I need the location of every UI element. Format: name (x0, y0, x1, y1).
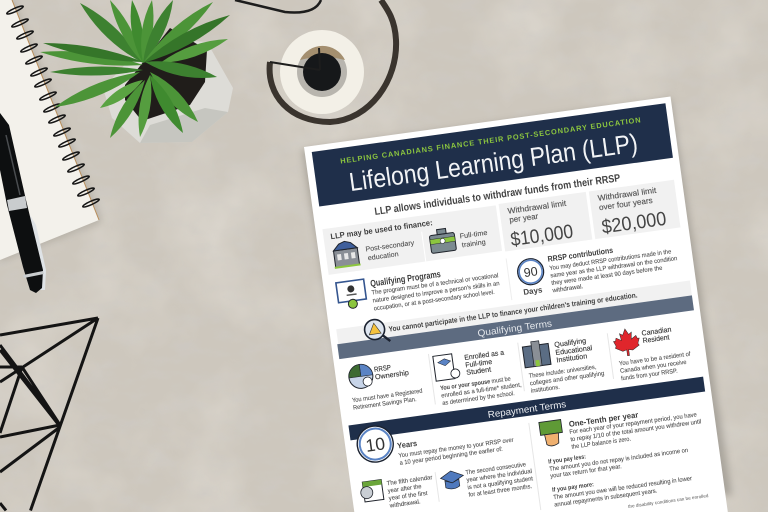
warning text: You cannot participate in the LLP to finance your children's training or education. (388, 290, 638, 334)
body: a 10 year period beginning the earlier of: (399, 446, 503, 467)
condition: second consecutive year (465, 460, 535, 499)
icon: 90 days ring (516, 257, 545, 286)
panel heading: LLP may be used to finance: (330, 218, 433, 241)
body: For each year of your repayment period, you have (569, 411, 698, 436)
body: The program must be of a technical or vocational (371, 272, 499, 297)
days label: Days (523, 285, 543, 297)
condition: second consecutive year: The second consecutive (465, 461, 527, 476)
icon: calendar (359, 480, 384, 502)
heading: Qualifying Programs (369, 268, 441, 289)
body: You may deduct RRSP contributions made in the (549, 248, 672, 272)
condition: fifth calendar year: year of the first (388, 490, 428, 502)
label: full-time training: Full-time (459, 230, 488, 241)
header banner (312, 103, 673, 206)
wire pyramid decoration (0, 318, 98, 510)
body (528, 363, 606, 395)
icon: 90 days ring: 90 (523, 264, 539, 280)
condition: second consecutive year: year where the individual (466, 468, 532, 484)
label: post-secondary education: Post-secondary (365, 240, 415, 254)
heading line 2: Full-time (465, 357, 493, 369)
note: if you pay less: your tax return for that year. (550, 463, 622, 480)
icon: 10 years ring (355, 424, 396, 464)
term: Canadian resident (612, 320, 693, 383)
icon: school building (331, 240, 361, 269)
label line 2: over four years (598, 196, 653, 212)
icon: document with cap (433, 353, 460, 381)
label line 2: per year (509, 212, 539, 225)
condition: second consecutive year: is not a qualifying student (467, 475, 534, 491)
condition: second consecutive year: for at least three months. (468, 483, 533, 499)
note: if you pay less: If you pay less: (548, 453, 586, 466)
panel: qualifying programs (336, 260, 502, 317)
footnote: the disability conditions can be enrolled (628, 493, 709, 509)
icon: toolbox (429, 227, 457, 254)
icon: money in hand (539, 420, 564, 447)
label continuation: education (367, 251, 399, 262)
condition: fifth calendar year (385, 474, 436, 510)
block: one-tenth per year (539, 410, 709, 509)
condition: fifth calendar year: withdrawal. (388, 498, 421, 510)
note: if you pay more: annual repayments in subsequent years. (554, 487, 658, 509)
panel: RRSP contributions (506, 235, 680, 300)
body: You must repay the money to your RRSP over (398, 437, 514, 459)
heading: RRSP (373, 363, 392, 374)
body: These include: universities, (528, 364, 597, 380)
body: You or your spouse must be (440, 375, 512, 392)
body (548, 248, 680, 295)
note: if you pay more: The amount you owe will be reduced resulting in lower (553, 475, 692, 501)
heading line 2: Ownership (374, 368, 409, 381)
heading line 3: Student (466, 365, 492, 377)
band: qualifying terms: Qualifying Terms (477, 318, 553, 339)
body: Retirement Savings Plan. (353, 396, 417, 412)
panel: finance uses (322, 205, 502, 275)
note: if you pay less (548, 439, 690, 480)
block: years (359, 437, 535, 510)
body: You must have a Registered (352, 388, 423, 404)
icon: pie chart (347, 363, 374, 390)
note: if you pay more: If you pay more: (552, 481, 594, 494)
heading: RRSP contributions (547, 246, 614, 264)
icon: maple leaf (612, 327, 641, 357)
icon: magnifier warning (363, 318, 390, 344)
body (619, 351, 693, 382)
panel: withdrawal limit over four years (589, 180, 681, 240)
notebook with spiral binding (0, 0, 102, 262)
heading line 2: Educational (555, 343, 593, 357)
infographic sheet (304, 96, 728, 512)
term: RRSP ownership (347, 356, 424, 412)
body: institutions. (531, 384, 560, 395)
upper sheet content (311, 103, 705, 440)
kicker: HELPING CANADIANS FINANCE THEIR POST-SECONDARY EDUCATION (340, 115, 641, 166)
body (371, 272, 502, 312)
body (569, 411, 703, 451)
value: $10,000 (509, 221, 575, 251)
body: withdrawal. (551, 283, 584, 295)
term: qualifying educational institution (522, 332, 606, 395)
body: funds from your RRSP. (621, 368, 678, 382)
band: qualifying terms (337, 295, 694, 359)
condition: fifth calendar year: The fifth calendar (386, 474, 433, 487)
body: occupation, or at a post-secondary school level. (373, 289, 495, 312)
body: to repay 1/10 of the total amount you withdrew until (570, 418, 702, 443)
panel: withdrawal limit per year (499, 192, 592, 252)
body: the LLP balance is zero. (571, 436, 632, 451)
body: as determined by the school. (442, 390, 515, 407)
icon: graduation cap (440, 469, 465, 490)
heading: Qualifying (554, 336, 587, 349)
pen (0, 113, 46, 293)
heading: One-Tenth per year (568, 410, 639, 429)
label continuation: training (462, 239, 486, 249)
title: Lifelong Learning Plan (LLP) (347, 128, 640, 197)
band: repayment terms: Repayment Terms (487, 399, 567, 421)
heading line 3: Institution (556, 351, 588, 364)
tape dispenser (235, 0, 396, 122)
heading: Canadian (641, 325, 672, 338)
body: same year as the LLP withdrawal on the condition (550, 255, 678, 280)
warning strip (336, 281, 692, 344)
heading line 2: Resident (642, 332, 670, 345)
condition: fifth calendar year: year after the (387, 483, 422, 495)
body (352, 388, 424, 412)
subhead: LLP allows individuals to withdraw funds from their RRSP (374, 172, 621, 218)
body (440, 374, 523, 407)
body: colleges and other qualifying (529, 370, 605, 387)
note: if you pay less: The amount you do not repay is included as income on (549, 447, 689, 473)
body: You have to be a resident of (619, 351, 691, 367)
icon: institution building (522, 340, 551, 368)
value: $20,000 (600, 208, 668, 238)
icon: certificate (336, 279, 367, 310)
heading: Enrolled as a (464, 348, 505, 362)
body: nature designed to improve a person's skills in an (372, 280, 500, 305)
plant in concrete pot (40, 0, 233, 143)
body (398, 437, 515, 467)
label: Withdrawal limit (597, 186, 658, 203)
icon: 10 years ring: 10 (364, 433, 387, 456)
paper shadow (302, 99, 732, 495)
note: if you pay more (552, 468, 693, 509)
body: Canada when you receive (620, 359, 687, 375)
band: repayment terms (348, 377, 705, 440)
term: enrolled full-time student (433, 345, 523, 407)
body: enrolled as a full-time* student, (441, 382, 522, 400)
body: they were made at least 90 days before the (551, 265, 663, 287)
label: Withdrawal limit (507, 199, 568, 216)
heading: Years (397, 439, 418, 451)
